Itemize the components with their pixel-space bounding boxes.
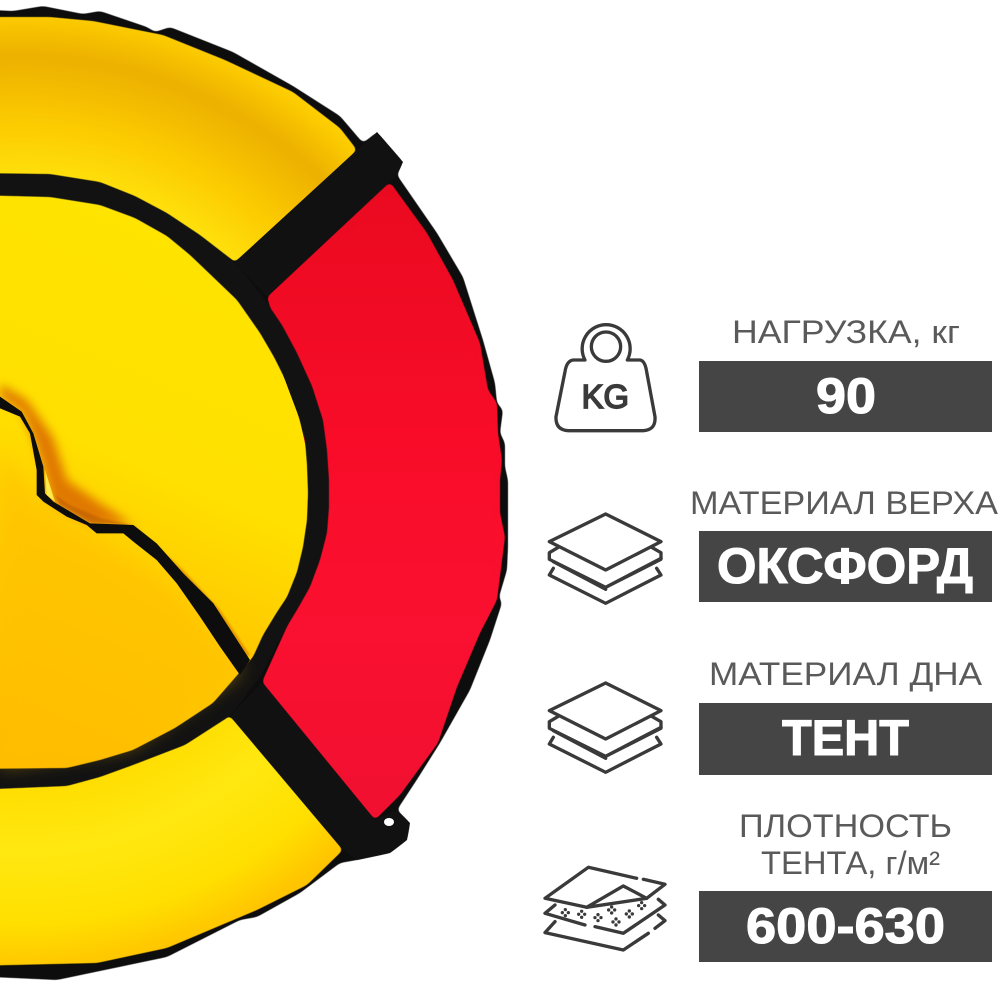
spec block: fabric density: [545, 808, 992, 962]
lower yellow panel: [0, 716, 343, 966]
tube outer black edge: [0, 6, 508, 980]
lower black strap and loop: [230, 682, 410, 860]
fold soft shadow: [0, 384, 133, 525]
value bar: [699, 891, 992, 962]
label: НАГРУЗКА, кг: [732, 314, 960, 350]
product photo: inflatable snow tube: [0, 6, 508, 980]
inner black ring seam: [0, 173, 329, 790]
icon label KG: KG: [582, 379, 629, 416]
icon: fabric layers: [549, 514, 661, 603]
fold seam: [0, 397, 250, 675]
label: МАТЕРИАЛ ВЕРХА: [690, 485, 999, 521]
spec block: load: [556, 314, 992, 432]
strap loop hole: [384, 818, 394, 826]
red panel: [262, 182, 505, 820]
fold deep shadow: [55, 495, 133, 525]
spec block: bottom material: [549, 656, 992, 775]
value: ОКСФОРД: [717, 538, 973, 594]
icon: kettlebell weight: [556, 325, 655, 431]
label: МАТЕРИАЛ ДНА: [709, 656, 983, 692]
value: 90: [816, 368, 876, 424]
centre yellow disk: [0, 185, 315, 780]
lower fold shadow: [133, 524, 250, 660]
upper black strap: [235, 132, 403, 297]
value bar: [699, 531, 992, 602]
value: ТЕНТ: [782, 710, 909, 766]
value bar: [699, 361, 992, 432]
value bar: [699, 703, 992, 775]
upper yellow panel: [0, 17, 357, 262]
lower disk tone below fold: [0, 450, 240, 765]
label second line: ТЕНТА, г/м²: [761, 845, 940, 881]
value: 600-630: [746, 898, 945, 954]
icon: laminated fabric layers: [545, 867, 665, 950]
spec block: top material: [549, 485, 999, 603]
icon: fabric layers: [549, 683, 661, 772]
fold highlight: [45, 470, 55, 502]
label: ПЛОТНОСТЬ: [739, 808, 952, 844]
